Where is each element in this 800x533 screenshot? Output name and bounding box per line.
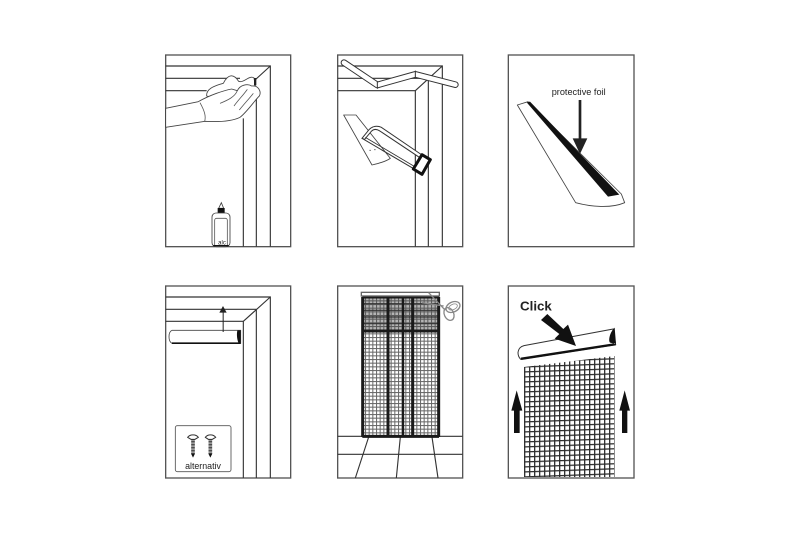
mesh curtain <box>362 297 439 437</box>
panel border <box>338 286 463 478</box>
finger lines <box>200 89 253 121</box>
mesh panel <box>523 355 615 477</box>
foil label: protective foil <box>552 87 606 97</box>
panel border <box>166 286 291 478</box>
panel: mount profile <box>166 286 291 478</box>
panel: cut profile to size <box>338 55 463 247</box>
panel: protective foil <box>508 55 634 247</box>
strip shadow and end cap <box>521 328 616 360</box>
panel: clean frame with alcohol <box>166 55 291 247</box>
panel border <box>508 55 634 247</box>
top rail <box>361 292 439 296</box>
icon: scissors <box>422 293 462 322</box>
profile strip <box>517 102 625 206</box>
icon: hacksaw <box>362 126 430 174</box>
arrow pointing to foil <box>573 100 587 154</box>
icon: screw <box>188 435 198 458</box>
click label: Click <box>520 298 552 313</box>
bottle label: alc <box>218 240 226 246</box>
bottle base <box>213 245 229 246</box>
right upward arrow <box>619 390 630 433</box>
icon: alcohol bottle <box>212 203 230 247</box>
upward arrow <box>219 306 227 332</box>
panel: curtain trim <box>338 286 463 478</box>
profile measured across the top <box>344 63 455 88</box>
cloth corner tool <box>254 78 256 85</box>
panel: click in mesh <box>508 286 634 478</box>
profile joints <box>377 71 415 88</box>
cut profile piece <box>344 115 390 165</box>
door frame lines <box>338 66 442 247</box>
inset: alternative screws <box>175 426 231 472</box>
profile strip <box>169 330 241 343</box>
floor tiles <box>338 436 463 478</box>
door frame lines <box>166 297 270 478</box>
strip shading <box>172 330 241 344</box>
cloth <box>207 76 255 97</box>
panel border <box>166 55 291 247</box>
left upward arrow <box>511 390 522 433</box>
blade marks <box>369 148 376 152</box>
hand and arm <box>166 85 260 127</box>
panel border <box>338 55 463 247</box>
click arrow <box>541 314 576 346</box>
door frame lines <box>166 66 270 247</box>
panel border <box>508 286 634 478</box>
black foil band <box>527 102 619 197</box>
profile strip <box>518 329 616 359</box>
icon: second screw <box>205 435 216 458</box>
inset label: alternativ <box>185 461 221 471</box>
instruction diagram <box>165 54 635 479</box>
